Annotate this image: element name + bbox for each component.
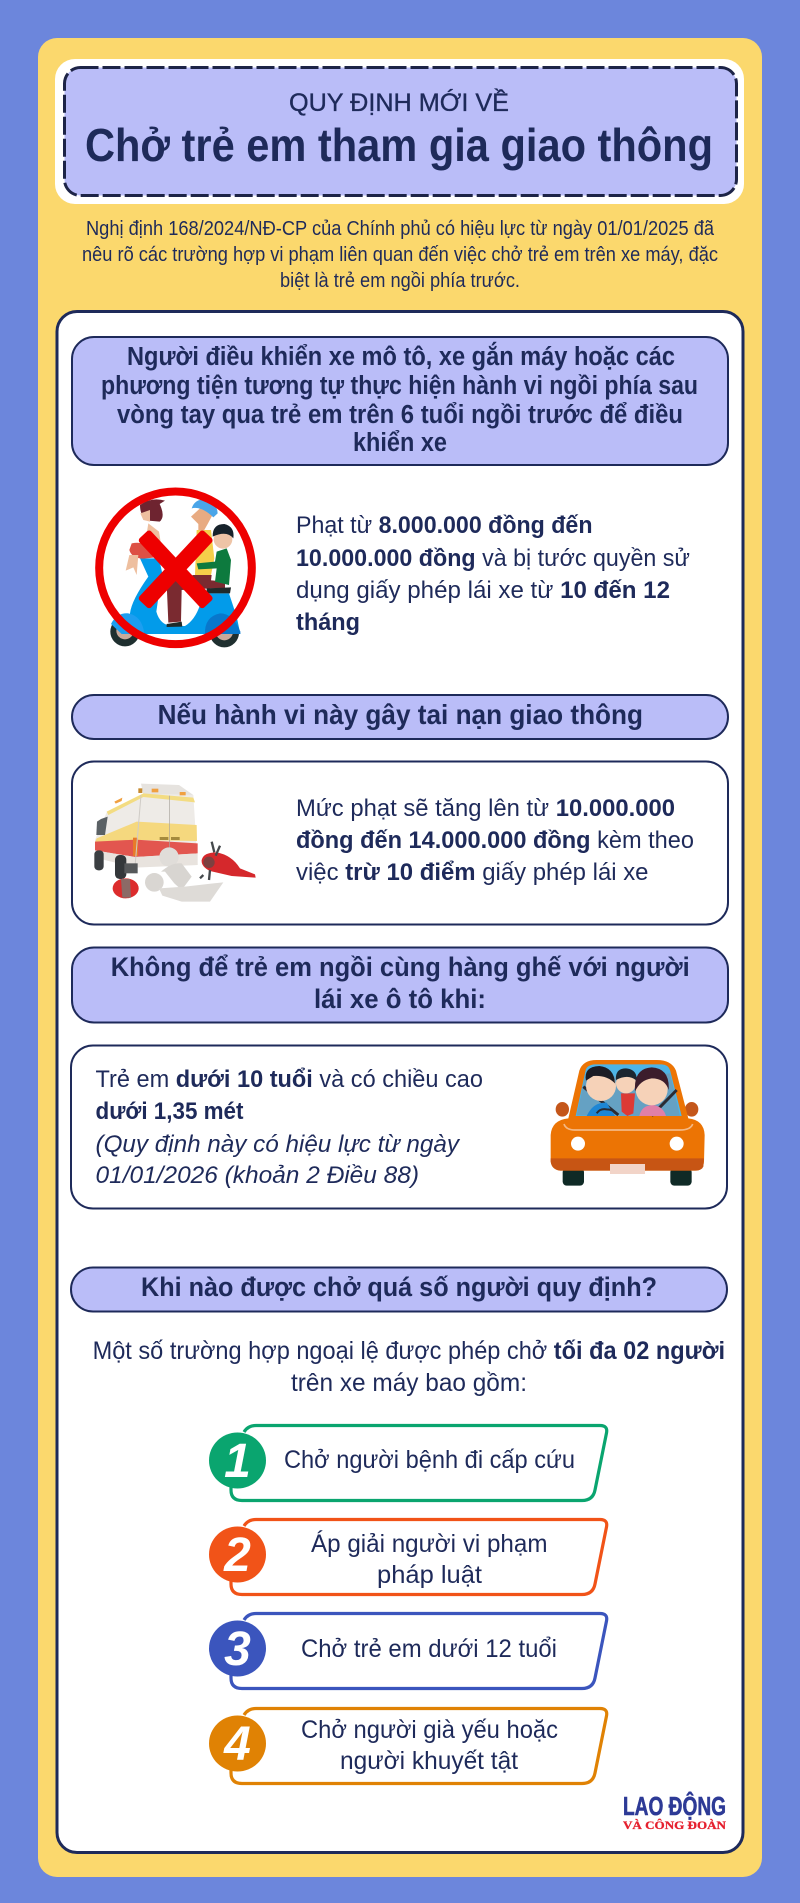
exceptions intro text: trên xe máy bao gồm: <box>291 1369 527 1397</box>
panel: car seat rule <box>71 1046 727 1208</box>
list item 1 <box>209 1426 607 1500</box>
list item 4: 4 <box>223 1718 251 1771</box>
heading: title: Chở trẻ em tham gia giao thông <box>85 119 713 171</box>
car rule text <box>96 1066 483 1189</box>
list item 2: 2 <box>223 1529 251 1582</box>
section heading: accident: Nếu hành vi này gây tai nạn giao thông <box>158 699 643 730</box>
section heading: motorbike rule <box>72 337 728 465</box>
header banner <box>55 59 744 204</box>
list item 1: 1 <box>224 1435 251 1488</box>
penalty text 1 <box>296 512 690 636</box>
icon: scooter with prohibition sign <box>99 491 252 647</box>
list item 3: Chở trẻ em dưới 12 tuổi <box>301 1635 557 1663</box>
car rule text: Trẻ em dưới 10 tuổi và có chiều cao <box>96 1066 483 1093</box>
section heading: car seat rule: lái xe ô tô khi: <box>314 984 486 1014</box>
section heading: motorbike rule: phương tiện tương tự thực hiện hành vi ngồi phía sau <box>101 372 698 400</box>
penalty text 1: tháng <box>296 609 360 636</box>
panel: accident penalty <box>72 762 728 924</box>
penalty text 1: Phạt từ 8.000.000 đồng đến <box>296 512 592 539</box>
list item 4: Chở người già yếu hoặc <box>301 1716 558 1744</box>
penalty text 2: việc trừ 10 điểm giấy phép lái xe <box>296 859 648 886</box>
logo: Lao Dong va Cong Doan: VÀ CÔNG ĐOÀN <box>623 1818 727 1832</box>
car rule text: 01/01/2026 (khoản 2 Điều 88) <box>96 1162 419 1189</box>
heading: kicker: QUY ĐỊNH MỚI VỀ <box>289 88 509 117</box>
penalty text 1: dụng giấy phép lái xe từ 10 đến 12 <box>296 577 670 604</box>
section heading: car seat rule: Không để trẻ em ngồi cùng hàng ghế với người <box>111 952 690 982</box>
prohibition ring <box>99 491 252 644</box>
section heading: accident <box>72 695 728 739</box>
list item 2: pháp luật <box>377 1561 482 1589</box>
logo: Lao Dong va Cong Doan: LAO ĐỘNG <box>623 1791 726 1821</box>
exceptions intro text <box>93 1337 725 1397</box>
penalty text 2 <box>296 795 694 886</box>
section heading: car seat rule <box>72 948 728 1022</box>
intro text: nêu rõ các trường hợp vi phạm liên quan đến việc chở trẻ em trên xe máy, đặc <box>82 244 718 266</box>
section heading: motorbike rule: vòng tay qua trẻ em trên 6 tuổi ngồi trước để điều <box>117 401 683 429</box>
list item 3 <box>209 1614 607 1688</box>
icon: ambulance accident scene <box>94 784 256 902</box>
section heading: exceptions: Khi nào được chở quá số người quy định? <box>141 1272 657 1302</box>
exceptions intro text: Một số trường hợp ngoại lệ được phép chở tối đa 02 người <box>93 1337 725 1365</box>
car rule text: (Quy định này có hiệu lực từ ngày <box>96 1131 461 1158</box>
section heading: motorbike rule: khiển xe <box>353 429 447 457</box>
section heading: exceptions <box>71 1268 727 1312</box>
list item 1: Chở người bệnh đi cấp cứu <box>284 1446 575 1474</box>
list item 4 <box>209 1708 607 1784</box>
panel: white content area <box>57 312 743 1852</box>
list item 2: Áp giải người vi phạm <box>311 1529 548 1558</box>
list item 4: người khuyết tật <box>340 1747 518 1775</box>
penalty text 1: 10.000.000 đồng và bị tước quyền sử <box>296 545 690 572</box>
intro text: biệt là trẻ em ngồi phía trước. <box>280 270 520 292</box>
car rule text: dưới 1,35 mét <box>96 1098 244 1125</box>
list item 3: 3 <box>224 1623 251 1676</box>
intro text <box>82 218 718 292</box>
intro text: Nghị định 168/2024/NĐ-CP của Chính phủ có hiệu lực từ ngày 01/01/2025 đã <box>86 218 715 240</box>
penalty text 2: Mức phạt sẽ tăng lên từ 10.000.000 <box>296 795 675 822</box>
section heading: motorbike rule: Người điều khiển xe mô tô, xe gắn máy hoặc các <box>127 341 675 371</box>
logo: Lao Dong va Cong Doan <box>623 1791 727 1832</box>
list item 2 <box>209 1520 607 1594</box>
icon: family in orange car <box>551 1060 705 1186</box>
penalty text 2: đồng đến 14.000.000 đồng kèm theo <box>296 827 694 854</box>
